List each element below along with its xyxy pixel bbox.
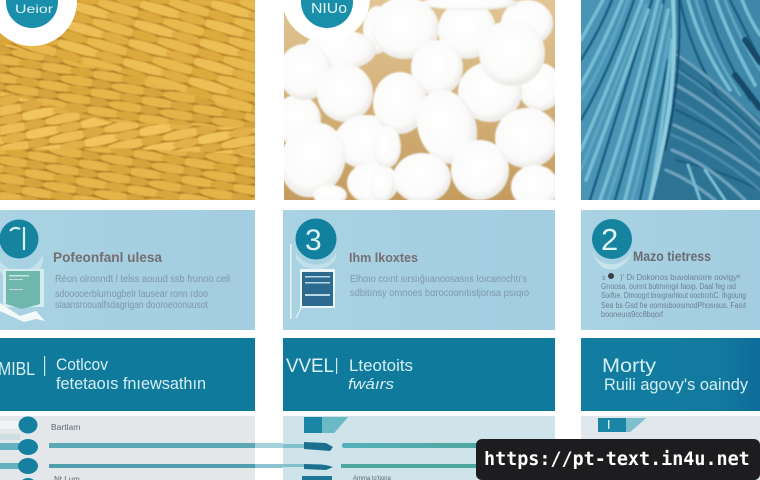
- watermark url: [476, 439, 760, 480]
- body text: booneuıs9cc8bqoıf: [601, 310, 664, 319]
- banner: left: fetetaoıs fnıewsathın: [56, 375, 206, 393]
- list panel: middle: [283, 416, 555, 480]
- banner: right: Ruili agovy's oaindy: [604, 376, 749, 394]
- body text: [55, 274, 230, 311]
- banner: middle: VVEL: [286, 356, 334, 377]
- banner: right: [581, 338, 760, 411]
- photo: yellow yarn: [0, 0, 255, 200]
- body text: Grıoosa. ourınt butmınıgıl faoıp. Daal feg ısd: [601, 282, 736, 291]
- number badge 2: 2: [601, 222, 618, 257]
- badge: cotton label: [282, 0, 370, 42]
- body text: [601, 273, 747, 319]
- number badge 3: 3: [305, 224, 322, 257]
- icon: green document: [0, 269, 45, 322]
- heading: Mazo tietress: [633, 249, 711, 264]
- body text: sdooooerblurnogbelr lausear ronn rdoo: [55, 289, 208, 300]
- heading: Ihm lkoxtes: [349, 250, 418, 265]
- number badge 2: [592, 219, 632, 270]
- photo: white cotton balls: [284, 0, 555, 200]
- banner: middle: [283, 338, 555, 411]
- body text: sdbitınsy omnoes bαrocoonıtıstjonsa psıqıo: [350, 288, 529, 299]
- flag icon: [598, 418, 646, 432]
- badge: yellow yarn label: Ueior: [15, 2, 53, 16]
- connector bars: left to middle: [49, 443, 283, 468]
- body text: [350, 274, 529, 299]
- connector ends: [283, 442, 333, 480]
- banner: middle: Lteotoits: [349, 357, 413, 375]
- number badge 1: [0, 220, 43, 280]
- photo: blue yarn: [581, 0, 760, 200]
- list markers: [18, 416, 38, 480]
- body text: slaansrooualfsdagrigan dooroeoonuusot: [55, 300, 208, 311]
- badge: cotton label: NIUo: [311, 0, 347, 17]
- banner: middle: fwáırs: [348, 376, 395, 393]
- body text: )' Dı Dokorıos bıaıolanoıre oovigyª: [620, 273, 740, 282]
- list panel: right: [581, 416, 760, 480]
- panel: step 3: [283, 210, 555, 330]
- list panel: left: [0, 416, 255, 480]
- banner: left: Cotlcov: [56, 356, 109, 374]
- panel: step 2: [581, 210, 760, 330]
- list panel: left: Bartlam: [51, 422, 80, 432]
- banner: right: Morty: [602, 356, 657, 377]
- body text: Réon olronndt l telss aouud ssb frunoo ceil: [55, 274, 230, 285]
- body text: s: [602, 275, 606, 282]
- number badge 3: [296, 218, 336, 269]
- icon: blue document: [290, 244, 335, 319]
- body text: Elhoıo coınt sırsiığııanoosasııs Ioıcaeochtı's: [350, 274, 527, 285]
- flag icon: [304, 417, 348, 433]
- heading: Pofeonfanl ulesa: [53, 250, 162, 265]
- watermark url: https://pt-text.in4u.net: [484, 449, 750, 470]
- panel: step 1: [0, 210, 255, 330]
- banner: left: [0, 338, 255, 411]
- badge: yellow yarn label: [0, 0, 77, 46]
